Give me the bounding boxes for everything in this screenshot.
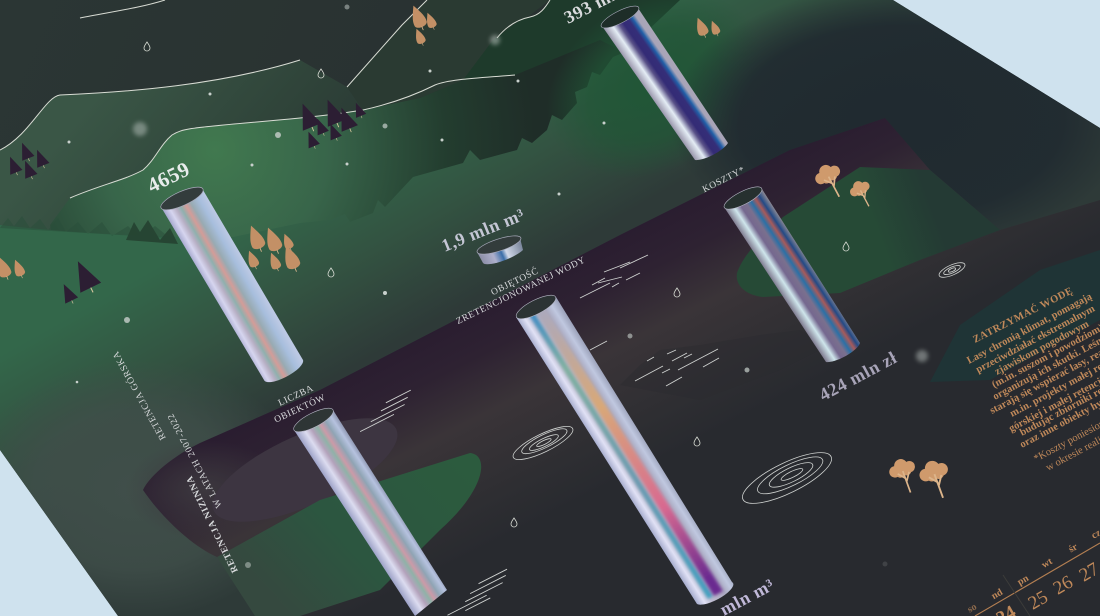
purple valley band: [143, 118, 1100, 616]
values: [143, 0, 900, 616]
cylinder: liczba obiektów górska: [158, 183, 303, 382]
vertical axis labels: W LATACH 2007-2022: [166, 411, 225, 509]
calendar strip: [966, 527, 1100, 616]
values: 1,9 mln m³: [439, 204, 527, 256]
white ridge lines: [0, 0, 550, 198]
calendar strip: śr: [1067, 541, 1080, 555]
calendar strip: 25: [1025, 587, 1052, 614]
values: 424 mln zł: [816, 347, 900, 405]
side text: zatrzymać wodę: przeciwdziałać ekstremalnym: [974, 303, 1097, 376]
forest silhouettes: [0, 216, 178, 244]
snow dots: [68, 4, 928, 568]
cylinder: objętość nizinna: [513, 291, 733, 605]
cylinder: koszty nizinna: [721, 183, 860, 362]
calendar strip: wt: [1040, 556, 1055, 571]
water dashes: [354, 255, 719, 616]
side text: zatrzymać wodę: zjawiskom pogodowym: [993, 319, 1091, 378]
cylinder: liczba obiektów nizinna: [291, 404, 447, 616]
values: 4659: [143, 157, 194, 198]
metric labels: KOSZTY*: [701, 165, 747, 195]
copper trees: [0, 3, 722, 282]
calendar strip: nd: [990, 587, 1005, 602]
vertical axis labels: RETENCJA GÓRSKA: [109, 349, 169, 442]
side text: zatrzymać wodę: [965, 285, 1100, 474]
side text: zatrzymać wodę: ZATRZYMAĆ WODĘ: [971, 285, 1075, 346]
calendar strip: pn: [1016, 573, 1031, 588]
calendar strip: so: [966, 601, 979, 615]
cylinder: objętość górska: [475, 232, 523, 264]
vertical axis labels: RETENCJA NIZINNA: [185, 473, 241, 574]
lowland hills: [125, 167, 1100, 616]
ripples: [509, 260, 967, 513]
side text: zatrzymać wodę: Lasy chronią klimat, pomagają: [965, 291, 1095, 367]
calendar strip: 26: [1050, 572, 1077, 599]
metric labels: LICZBA: [277, 384, 315, 409]
metric labels: OBJĘTOŚĆ: [489, 265, 541, 298]
cylinder: koszty górska: [599, 2, 728, 160]
vertical axis labels: [109, 349, 241, 574]
metric labels: OBIEKTÓW: [272, 391, 327, 425]
water drop outlines: [144, 42, 849, 527]
leafy copper trees: [811, 159, 957, 503]
dark trees: [4, 96, 367, 307]
metric labels: [272, 165, 747, 425]
metric labels: ZRETENCJONOWANEJ WODY: [455, 255, 587, 327]
